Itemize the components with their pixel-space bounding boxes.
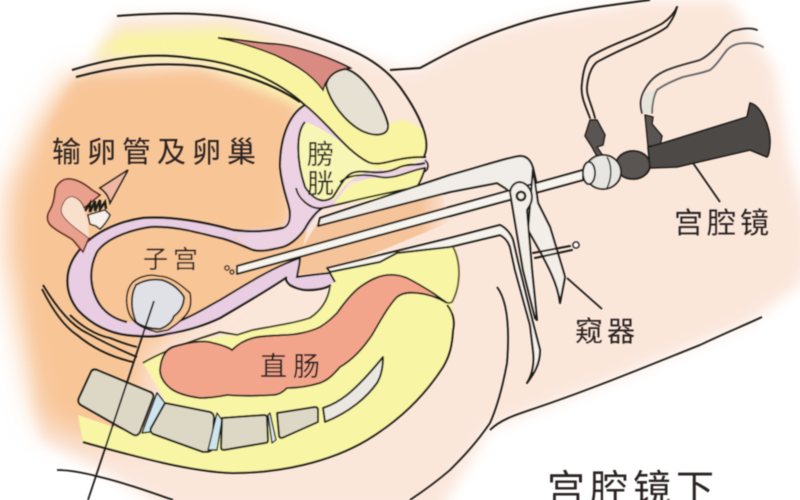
nozzles	[585, 115, 662, 158]
outer handle	[528, 168, 565, 303]
abdominal wall	[117, 0, 650, 170]
lower pelvic lines	[42, 285, 762, 500]
peritoneum lines	[72, 56, 305, 105]
lower blade	[327, 225, 540, 383]
handle	[648, 103, 770, 168]
vaginal canal fill	[296, 185, 450, 275]
label: bladder: 膀	[307, 140, 334, 170]
fibroid	[127, 275, 191, 332]
orange abdominal cavity	[40, 68, 298, 400]
thumb screw	[533, 242, 579, 258]
label: uterus: 子宫	[143, 246, 203, 274]
label: rectum: 直肠	[260, 352, 326, 382]
tube two	[641, 28, 763, 113]
hysteroscope leader line	[693, 163, 720, 202]
ovary and fallopian tube	[47, 170, 128, 252]
upper blade	[318, 156, 538, 226]
belly orange background	[6, 75, 300, 440]
hysteroscope	[582, 7, 770, 189]
labial folds	[424, 160, 428, 172]
bladder	[233, 105, 428, 250]
hysteroscope rod	[225, 170, 583, 274]
pubic muscle	[218, 38, 350, 90]
pivot arm	[510, 182, 537, 320]
speculum leader line	[567, 278, 602, 309]
speculum	[225, 156, 583, 383]
vagina and uterus outer wall	[68, 208, 335, 336]
fibroid leader line	[88, 301, 154, 500]
joint and ball	[583, 151, 650, 189]
label: hysteroscope: 宫腔镜	[674, 207, 773, 240]
pubic bone	[326, 69, 388, 135]
label: bladder: 胱	[307, 169, 334, 199]
label: fallopian tube and ovary: 输卵管及卵巢	[52, 136, 262, 169]
pivot	[517, 192, 525, 200]
rectum	[160, 275, 447, 398]
sacrum	[78, 357, 383, 452]
label: speculum: 窥器	[575, 316, 639, 347]
tube one	[582, 7, 677, 118]
yellow band and sacrum region	[78, 240, 459, 473]
yellow fat layer upper	[92, 28, 415, 170]
